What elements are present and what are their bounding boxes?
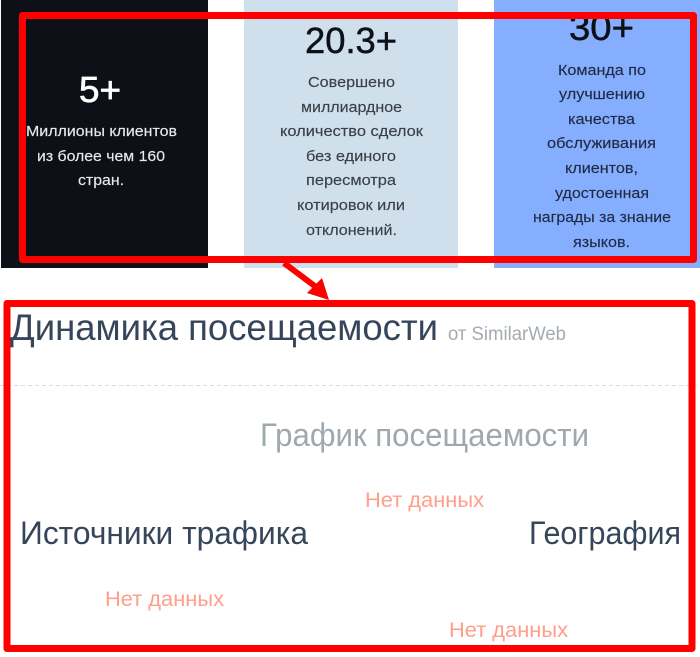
light card description (280, 74, 423, 239)
no-data note: traffic chart: Нет данных (365, 489, 485, 512)
heading: traffic sources: Источники трафика (20, 515, 308, 551)
light card description: отклонений. (306, 222, 397, 239)
heading: geography: География (529, 515, 681, 551)
blue card description: клиентов, (565, 160, 638, 177)
stat number: 30+: 30+ (569, 7, 634, 48)
blue card description: улучшению (559, 86, 645, 103)
light card description: пересмотра (306, 172, 397, 189)
light card description: Совершено (308, 74, 395, 91)
blue card description: удостоенная (555, 185, 649, 202)
no-data note: geography: Нет данных (449, 619, 569, 642)
blue card description: награды за знание (533, 209, 671, 226)
blue card description: обслуживания (547, 135, 656, 152)
light card description: без единого (306, 148, 396, 165)
panel: traffic dynamics (0, 307, 700, 642)
callout frame: stat cards (22, 16, 694, 260)
panel: dark stat card (1, 0, 208, 268)
blue card description: качества (568, 111, 636, 128)
heading: traffic chart: График посещаемости (260, 417, 589, 453)
panel: bright blue stat card (494, 0, 700, 268)
dark card description: из более чем 160 (37, 148, 165, 165)
callout frame: traffic panel (7, 304, 692, 648)
blue card description: языков. (573, 234, 630, 251)
blue card description (533, 62, 671, 251)
blue card description: Команда по (558, 62, 646, 79)
panel: light blue-gray stat card (244, 0, 458, 268)
source note: от SimilarWeb (448, 324, 566, 345)
light card description: миллиардное (301, 99, 402, 116)
light card description: котировок или (297, 197, 405, 214)
heading: traffic dynamics: Динамика посещаемости (10, 307, 438, 348)
stat number: 20.3+: 20.3+ (305, 20, 397, 61)
arrow: from stat cards to traffic panel (284, 263, 329, 300)
dark card description: стран. (78, 172, 124, 189)
stat number: 5+: 5+ (79, 69, 121, 110)
dark card description: Миллионы клиентов (26, 123, 177, 140)
light card description: количество сделок (280, 123, 423, 140)
dark card description (26, 123, 177, 189)
no-data note: traffic sources: Нет данных (105, 588, 225, 611)
